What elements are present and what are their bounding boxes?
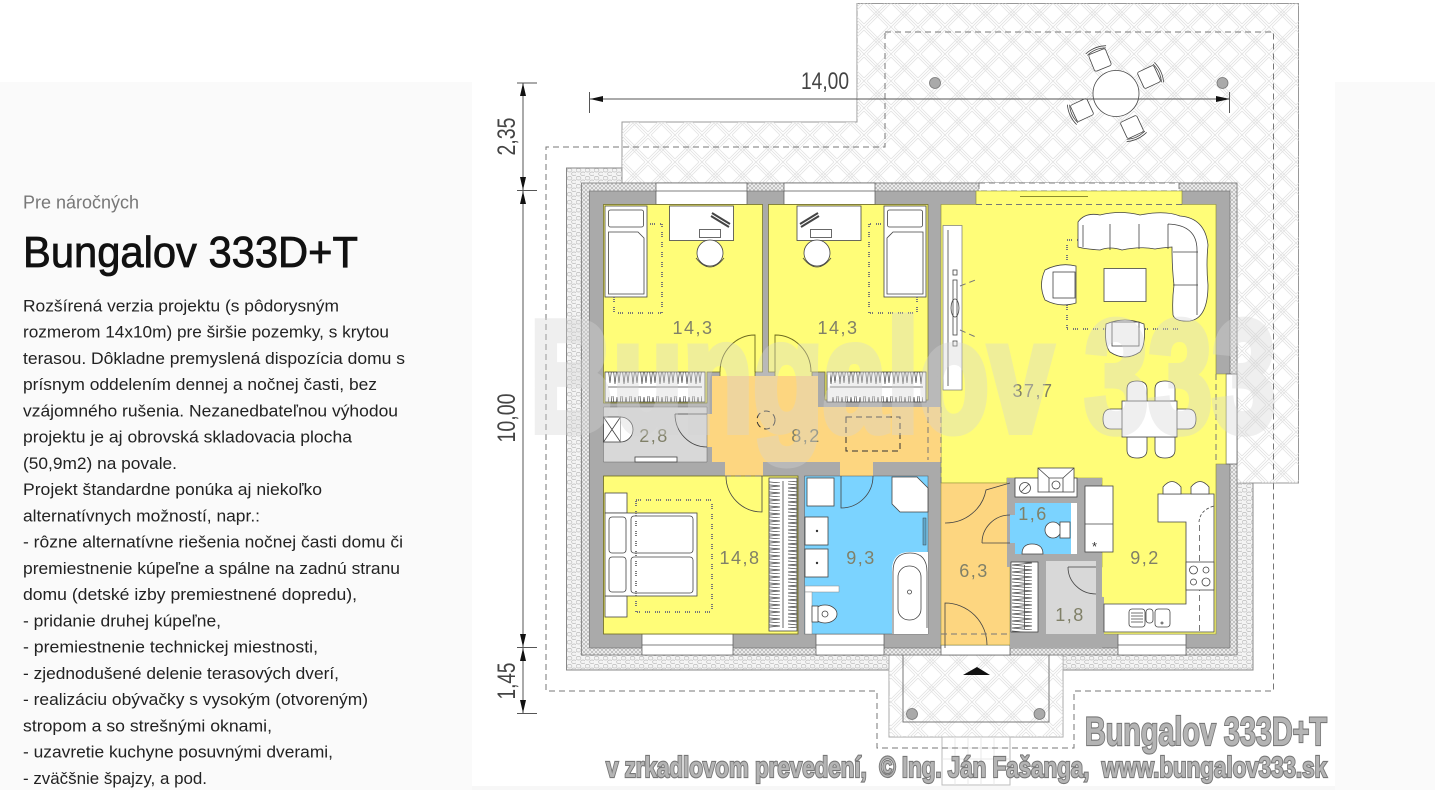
room areas: 14,8: [719, 548, 761, 568]
description paragraph: terasou. Dôkladne premyslená dispozícia domu s: [23, 349, 405, 368]
utility room 2.8: [604, 407, 707, 462]
bedroom left furniture: [605, 206, 734, 313]
master bedroom 14.8: [604, 476, 798, 634]
overhead dashed lines: [725, 204, 1216, 634]
room areas: 2,8: [639, 426, 669, 446]
room areas: 8,2: [791, 426, 821, 446]
armchair bottom: [1106, 320, 1144, 357]
room areas: 6,3: [959, 561, 989, 581]
room areas: 9,2: [1130, 548, 1160, 568]
description paragraph: - rôzne alternatívne riešenia nočnej časti domu či: [23, 533, 403, 552]
description paragraph: vzájomného rušenia. Nezanedbateľnou výhodou: [23, 401, 398, 420]
room areas: [639, 318, 1160, 625]
dimension: width 14,00: [590, 68, 1230, 113]
living room sliding door line: [1020, 196, 1088, 198]
gravel strip around house: [566, 168, 1253, 670]
entrance arrow: [963, 667, 990, 675]
toilet: [813, 605, 837, 623]
eyebrow label: Pre náročných: [23, 192, 139, 212]
armchair left: [1042, 265, 1076, 305]
hob: [1186, 562, 1214, 590]
sink: [1129, 609, 1170, 627]
rear terrace paving: [622, 4, 1298, 483]
description paragraph: - realizáciu obývačky s vysokým (otvoreným): [23, 690, 368, 709]
room areas: 9,3: [846, 548, 876, 568]
room: living room and kitchen: [941, 191, 1226, 634]
dimension: depths: 10,00: [493, 394, 521, 442]
bathroom fixtures: [805, 477, 928, 634]
pantry 1.8: [1046, 561, 1096, 634]
shower screen: [923, 518, 926, 545]
bedroom 14.3 left: [604, 204, 762, 403]
core block walls: [1007, 478, 1104, 648]
toilet white strip: [1071, 503, 1077, 554]
bedroom right furniture: [797, 206, 926, 313]
bathroom 9.3: [804, 476, 928, 634]
front terrace: [889, 655, 1063, 737]
description paragraph: - uzavretie kuchyne posuvnými dverami,: [23, 743, 333, 762]
bottom margin background: [472, 786, 1335, 790]
roof outline: [546, 32, 1274, 748]
insulation band: [582, 183, 1237, 655]
description paragraph: (50,9m2) na povale.: [23, 454, 177, 473]
room areas: 1,8: [1055, 605, 1085, 625]
description paragraph: alternatívnych možností, napr.:: [23, 506, 260, 525]
dining set: [1103, 381, 1196, 458]
description paragraph: rozmerom 14x10m) pre širšie pozemky, s krytou: [23, 323, 389, 342]
title: Bungalov 333D+T: [23, 228, 358, 277]
description paragraph: domu (detské izby premiestnené dopredu),: [23, 585, 357, 604]
dimension: depths: [493, 83, 537, 714]
room areas: 1,6: [1018, 504, 1048, 524]
room areas: 37,7: [1012, 381, 1054, 401]
toilet 1.6: [1010, 503, 1071, 554]
window openings: [642, 183, 1237, 655]
dimension: depths: 2,35: [493, 118, 521, 156]
description paragraph: - zjednodušené delenie terasových dverí,: [23, 664, 339, 683]
living room TV wall: [943, 226, 978, 390]
utility room equipment: [604, 417, 677, 462]
description paragraph: prísnym oddelením dennej a nočnej časti, bez: [23, 375, 377, 394]
master bedroom bed: [605, 493, 712, 617]
toilet fixtures: [1022, 522, 1070, 554]
bar stools: [1163, 482, 1209, 494]
description paragraph: Projekt štandardne ponúka aj niekoľko: [23, 480, 322, 499]
dimension: width 14,00: 14,00: [801, 68, 849, 95]
description paragraph: [23, 296, 405, 788]
description paragraph: - zväčšnie špajzy, a pod.: [23, 769, 207, 788]
stamp: model name: Bungalov 333D+T: [1085, 710, 1327, 754]
technical niche: [1015, 468, 1077, 497]
left text panel background: [0, 82, 472, 790]
text panel: project description: [23, 192, 405, 788]
description paragraph: stropom a so strešnými oknami,: [23, 716, 272, 735]
coffee table: [1104, 268, 1146, 302]
bedroom 14.3 right: [768, 204, 928, 400]
bathtub: [892, 552, 928, 634]
living room rug: [1067, 240, 1180, 329]
door swings: [675, 335, 1096, 648]
dimension: depths: 1,45: [493, 662, 521, 700]
bedroom right wardrobe: [827, 372, 926, 402]
room areas: 14,3: [672, 318, 714, 338]
double sink: [805, 517, 828, 545]
description paragraph: - pridanie druhej kúpeľne,: [23, 611, 221, 630]
shower: [892, 477, 928, 512]
description paragraph: projektu je aj obrovská skladovacia plocha: [23, 428, 353, 447]
right margin background: [1335, 82, 1435, 790]
front steps: [942, 737, 1010, 785]
master bedroom wardrobe: [769, 478, 797, 631]
corridor 8.2: [707, 376, 941, 476]
fridge and tall units: [1085, 486, 1113, 552]
hall closet: [1011, 562, 1038, 632]
bedroom left wardrobe: [605, 372, 705, 402]
description paragraph: Rozšírená verzia projektu (s pôdorysným: [23, 296, 339, 315]
washing machine: [807, 478, 834, 506]
corner sofa: [1078, 212, 1208, 321]
partition: [805, 586, 839, 592]
room areas: 14,3: [817, 318, 859, 338]
description paragraph: premiestnenie kúpeľne a spálne na zadnú stranu: [23, 559, 400, 578]
terrace table with chairs: [1066, 44, 1165, 143]
rear terrace: [622, 4, 1298, 483]
entrance hall 6.3: [941, 483, 1010, 645]
description paragraph: - premiestnenie technickej miestnosti,: [23, 638, 318, 657]
house walls: [590, 191, 1230, 648]
floor plan: [493, 4, 1328, 785]
kitchen counters: *: [1092, 539, 1097, 554]
columns: [906, 78, 1228, 720]
kitchen counters: [1085, 486, 1214, 632]
